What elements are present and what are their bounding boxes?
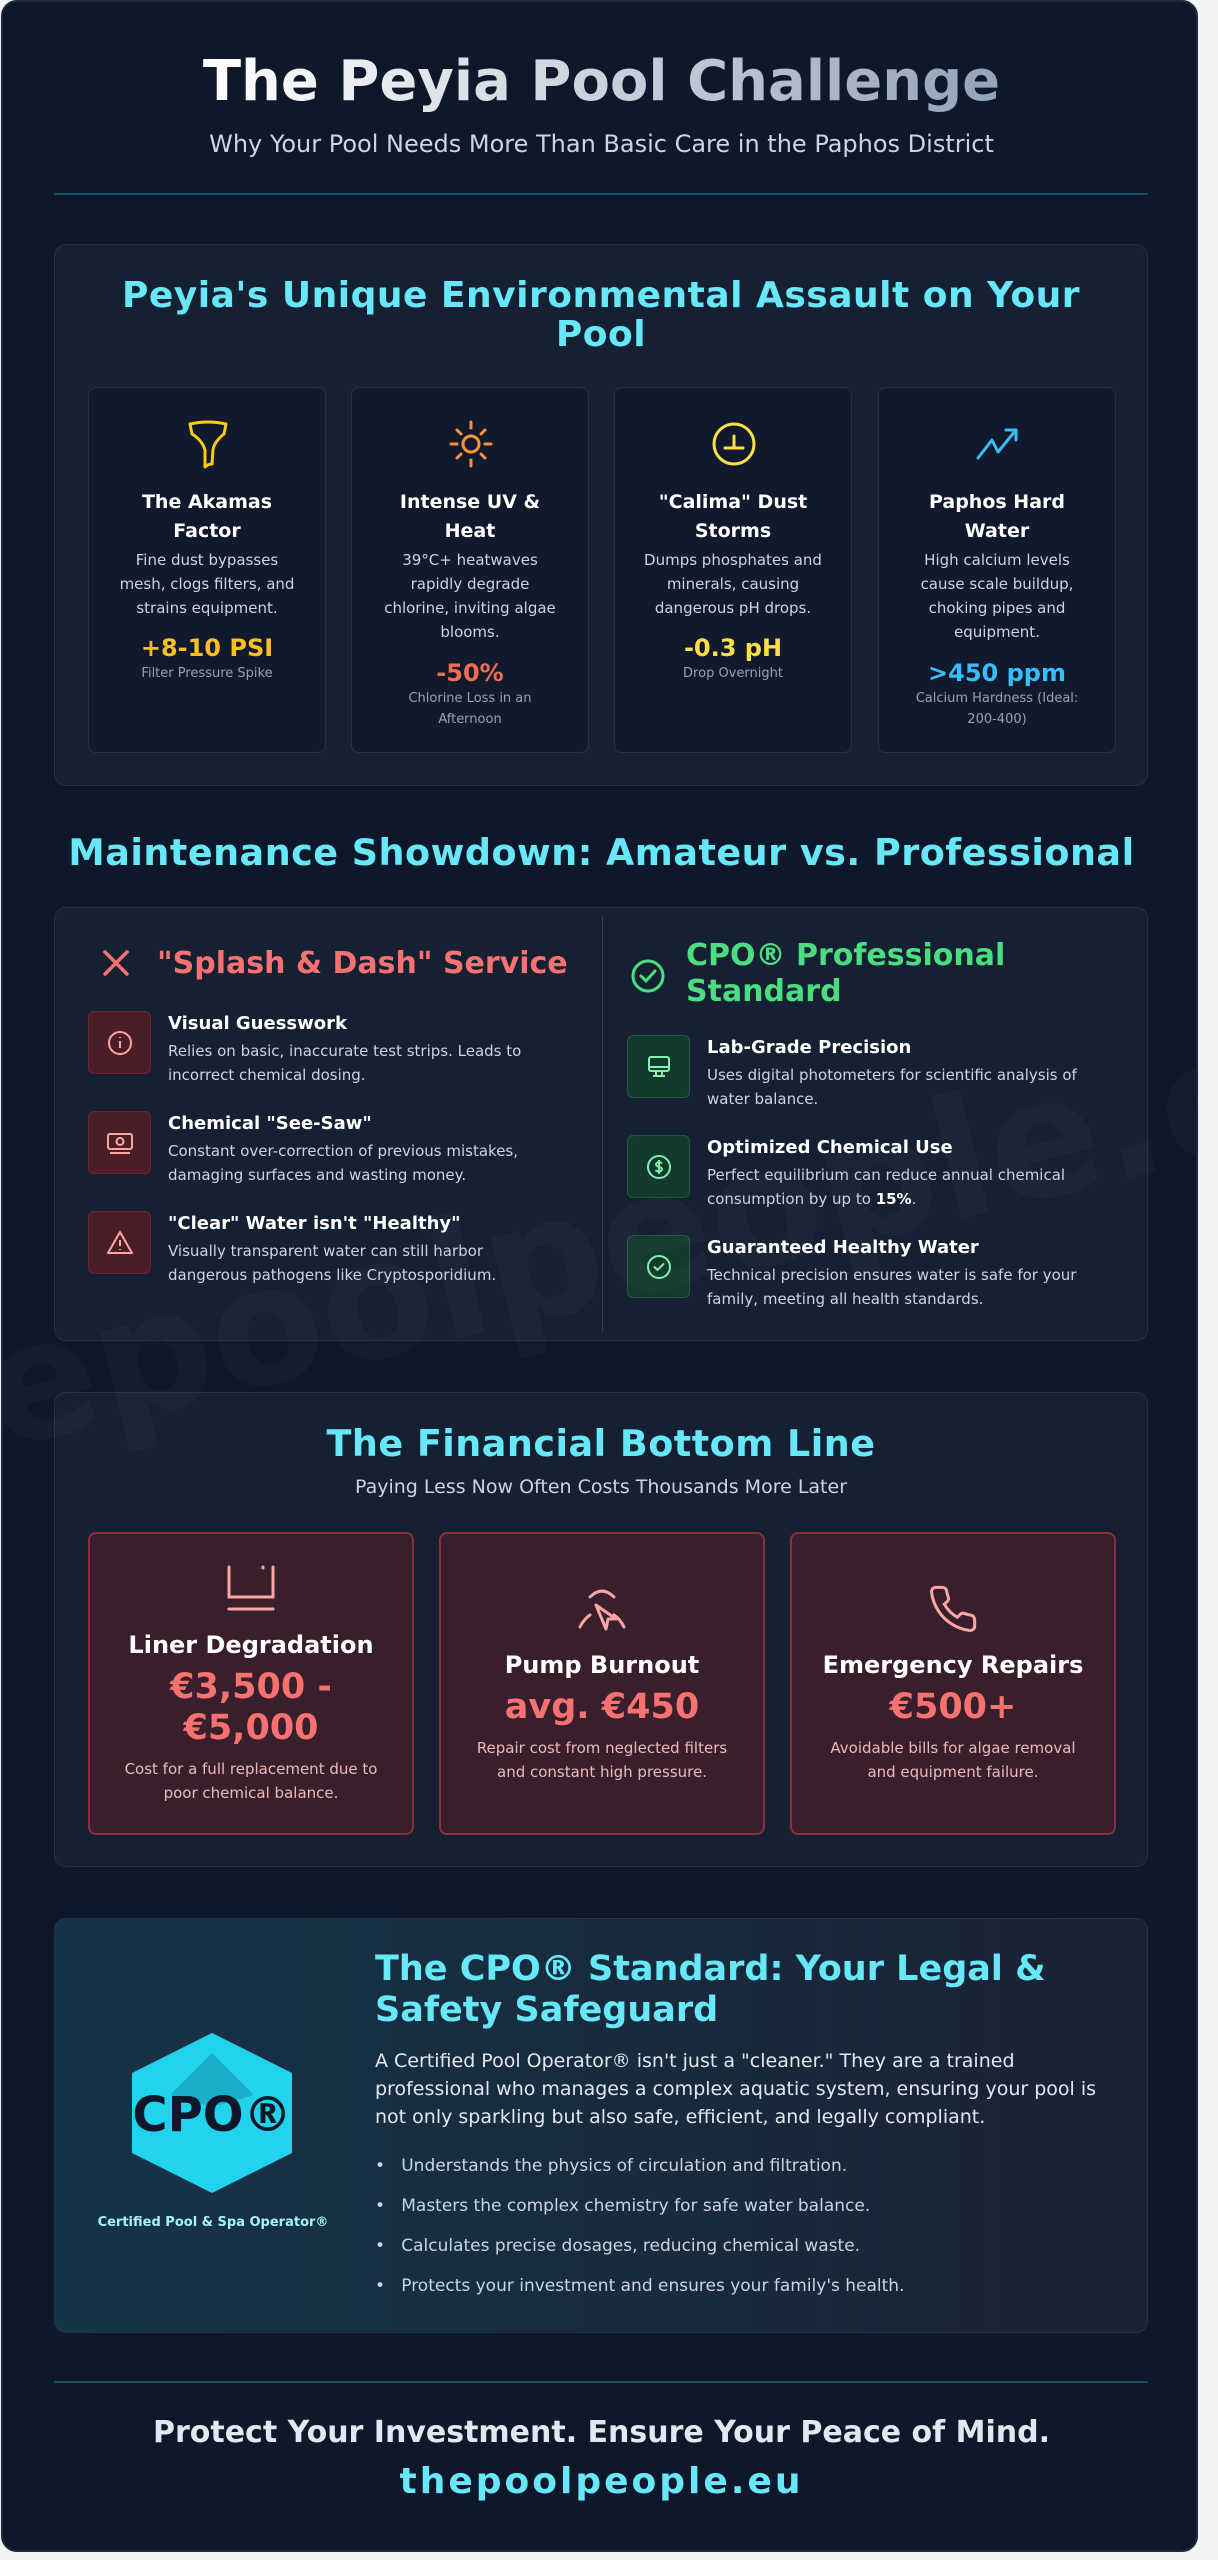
card: liner: €3,500 -: [170, 1666, 332, 1706]
card: hard water: Calcium Hardness (Ideal: 200-400): [916, 691, 1078, 727]
item: chemical see-saw: Constant over-correction of previous mistakes, damaging surfaces and wasting money.: [168, 1142, 518, 1184]
card: pump: avg. €450: [505, 1687, 699, 1727]
card: hard water: [878, 387, 1116, 753]
card: UV heat: -50%: [436, 659, 504, 687]
item: visual guesswork: Visual Guesswork: [168, 1013, 347, 1034]
panel: environmental assault: [54, 244, 1148, 786]
card: calima: [614, 387, 852, 753]
card: hard water: >450 ppm: [928, 659, 1066, 687]
card: emergency: and equipment failure.: [867, 1763, 1039, 1781]
item: clear water: Visually transparent water can still harbor dangerous pathogens like Cryptosporidium.: [168, 1242, 496, 1284]
item: lab-grade: Lab-Grade Precision: [707, 1037, 911, 1058]
subtitle: Why Your Pool Needs More Than Basic Care in the Paphos District: [209, 130, 994, 158]
card: emergency: Avoidable bills for algae removal: [830, 1739, 1076, 1757]
heading: splash & dash: "Splash & Dash" Service: [157, 946, 568, 980]
panel: financial: [54, 1392, 1148, 1867]
heading: cpo professional: Standard: [686, 974, 842, 1009]
icon: CPO badge: [98, 2033, 328, 2230]
card: pump: [439, 1532, 765, 1835]
list: CPO skills: • Calculates precise dosages, reducing chemical waste.: [375, 2236, 860, 2256]
icon: sun: [450, 420, 492, 468]
item: clear water: [88, 1211, 496, 1284]
item: optimized chemical: [627, 1135, 1065, 1208]
item: healthy water: [627, 1235, 1076, 1308]
icon: CPO badge: CPO®: [132, 2087, 292, 2143]
icon: gauge: [712, 422, 756, 466]
card: UV heat: Chlorine Loss in an Afternoon: [408, 691, 532, 727]
item: chemical see-saw: Chemical "See-Saw": [168, 1113, 372, 1134]
card: pump: and constant high pressure.: [497, 1763, 707, 1781]
heading: showdown: Maintenance Showdown: Amateur vs. Professional: [68, 831, 1135, 874]
subheading: Paying Less Now Often Costs Thousands More Later: [355, 1476, 847, 1498]
item: healthy water: Technical precision ensures water is safe for your family, meeting all health standards.: [707, 1266, 1076, 1308]
heading: cpo professional: CPO® Professional: [686, 938, 1005, 973]
icon: trend: [976, 428, 1018, 460]
list: CPO skills: • Understands the physics of circulation and filtration.: [375, 2156, 847, 2176]
title: The Peyia Pool Challenge: [203, 49, 1000, 114]
card: liner: poor chemical balance.: [164, 1784, 338, 1802]
card: calima: Drop Overnight: [683, 666, 783, 681]
card: hard water: Paphos Hard Water: [929, 491, 1065, 542]
card: akamas: The Akamas Factor: [142, 491, 272, 542]
card: liner: Liner Degradation: [128, 1630, 374, 1658]
icon: funnel: [188, 420, 228, 469]
card: emergency: [790, 1532, 1116, 1835]
card: pump: Repair cost from neglected filters: [477, 1739, 727, 1757]
panel: CPO standard: [54, 1918, 1148, 2333]
list: CPO skills: • Protects your investment and ensures your family's health.: [375, 2276, 904, 2296]
card: emergency: Emergency Repairs: [823, 1651, 1083, 1679]
list: CPO skills: [375, 2156, 904, 2296]
text: CPO description: A Certified Pool Operator® isn't just a "cleaner." They are a trained professional who manages a complex aquatic system, ensuring your pool is not only sparkling but also safe, efficient, and legally compliant.: [375, 2050, 1096, 2128]
card: calima: "Calima" Dust Storms: [659, 491, 807, 542]
card: UV heat: [351, 387, 589, 753]
item: healthy water: Guaranteed Healthy Water: [707, 1237, 979, 1258]
heading: CPO standard: The CPO® Standard: Your Legal & Safety Safeguard: [375, 1949, 1046, 2030]
item: lab-grade: Uses digital photometers for scientific analysis of water balance.: [707, 1066, 1077, 1108]
card: akamas: Filter Pressure Spike: [141, 666, 273, 681]
item: visual guesswork: Relies on basic, inaccurate test strips. Leads to incorrect chemical dosing.: [168, 1042, 521, 1084]
icon: CPO badge: Certified Pool & Spa Operator®: [98, 2215, 328, 2230]
card: akamas: Fine dust bypasses mesh, clogs filters, and strains equipment.: [120, 551, 294, 617]
item: visual guesswork: [88, 1011, 521, 1084]
panel: showdown: [54, 907, 1148, 1341]
item: chemical see-saw: [88, 1111, 518, 1184]
card: UV heat: Intense UV & Heat: [400, 491, 540, 542]
card: akamas: +8-10 PSI: [141, 634, 273, 662]
card: emergency: €500+: [890, 1687, 1016, 1727]
card: liner: Cost for a full replacement due to: [125, 1760, 377, 1778]
footer url: thepoolpeople.eu: [400, 2461, 804, 2502]
card: calima: -0.3 pH: [684, 634, 782, 662]
item: optimized chemical: Optimized Chemical Use: [707, 1137, 953, 1158]
item: optimized chemical: Perfect equilibrium can reduce annual chemical consumption by up to 15%.: [707, 1166, 1065, 1208]
heading: cpo professional: [632, 938, 1005, 1009]
item: lab-grade: [627, 1035, 1078, 1108]
card: akamas: [88, 387, 326, 753]
card: hard water: High calcium levels cause scale buildup, choking pipes and equipment.: [921, 551, 1073, 641]
card: liner: €5,000: [183, 1708, 319, 1748]
heading: financial: The Financial Bottom Line: [326, 1422, 876, 1465]
card: UV heat: 39°C+ heatwaves rapidly degrade chlorine, inviting algae blooms.: [384, 551, 556, 641]
card: calima: Dumps phosphates and minerals, causing dangerous pH drops.: [644, 551, 822, 617]
heading: environmental: Peyia's Unique Environmental Assault on Your Pool: [122, 275, 1080, 355]
footer tagline: Protect Your Investment. Ensure Your Peace of Mind.: [153, 2415, 1050, 2450]
list: CPO skills: • Masters the complex chemistry for safe water balance.: [375, 2196, 870, 2216]
item: clear water: "Clear" Water isn't "Healthy": [168, 1213, 461, 1234]
card: pump: Pump Burnout: [505, 1651, 699, 1679]
card: liner: [88, 1532, 414, 1835]
